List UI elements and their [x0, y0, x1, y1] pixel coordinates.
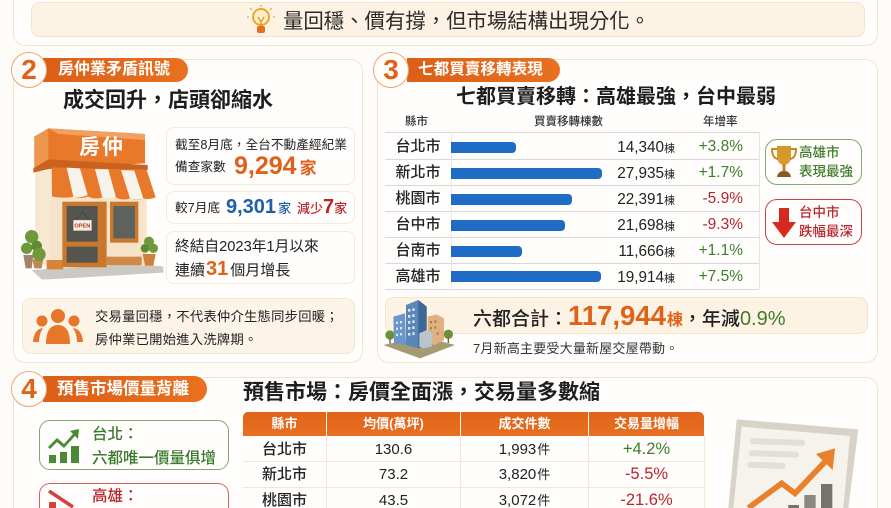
badge: Kaohsiung: 高雄： — [92, 488, 139, 505]
badge: Taipei rising: 六都唯一價量俱增 — [92, 450, 216, 467]
text: top conclusion: 量回穩、價有撐，但市場結構出現分化。 — [283, 11, 650, 33]
row: Taichung: 台中市 — [395, 216, 440, 233]
badge: Taichung deepest fall: 台中市 — [799, 205, 840, 220]
text: -5.5% — [625, 465, 668, 483]
presale table header — [243, 412, 704, 436]
text: realtor reshuffle: 房仲業已開始進入洗牌期。 — [95, 332, 258, 347]
icon: trophy — [771, 146, 797, 177]
ribbon: section 2: 房仲業矛盾訊號 — [58, 61, 170, 78]
row: Taoyuan: 桃園市 — [395, 190, 440, 207]
presale table header: 交易量增幅 — [614, 416, 679, 431]
panel: metro transfers — [377, 59, 878, 363]
text: 21,698棟 — [617, 217, 675, 234]
text: -5.9% — [702, 190, 743, 207]
number badge 2: 2 — [21, 54, 37, 85]
badge: Kaohsiung strongest — [765, 139, 862, 185]
number badge 4 — [11, 371, 47, 407]
stat box: compared to July — [166, 191, 355, 224]
text: +1.1% — [699, 242, 743, 259]
ribbon: section 3 — [407, 58, 560, 82]
text: 27,935棟 — [617, 165, 675, 182]
stat box: compared to July: 減少7家 — [297, 196, 347, 218]
text: realtor reshuffle: 交易量回穩，不代表仲介生態同步回暖； — [95, 309, 339, 324]
transfer table header — [405, 115, 738, 128]
badge: Kaohsiung — [39, 483, 229, 508]
ribbon: section 2 — [43, 58, 188, 82]
text: 14,340棟 — [617, 139, 675, 156]
panel: presale market — [13, 377, 878, 508]
text: +3.8% — [699, 138, 743, 155]
badge: Taichung deepest fall: 跌幅最深 — [799, 224, 853, 238]
heading: section 3: 七都買賣移轉：高雄最強，台中最弱 — [456, 86, 776, 108]
presale table header: 均價(萬坪) — [363, 416, 424, 431]
icon: report with rising arrow — [728, 420, 858, 508]
icon: people — [33, 309, 83, 344]
presale row: New Taipei: 新北市 — [262, 466, 307, 483]
text: 1,993件 — [499, 441, 550, 458]
icon: red down arrow — [772, 208, 796, 238]
row: Kaohsiung: 高雄市 — [395, 268, 440, 285]
row: Taipei: 台北市 — [395, 138, 440, 155]
text: +4.2% — [623, 440, 670, 458]
stat box: registered firms: 截至8月底，全台不動產經紀業 — [175, 138, 347, 152]
stat box: registered firms: 備查家數 — [175, 160, 226, 174]
row: New Taipei: 新北市 — [395, 164, 440, 181]
stat box: compared to July: 較7月底 — [175, 201, 220, 215]
number badge 3: 3 — [383, 54, 399, 85]
stat box: compared to July: 9,301家 — [226, 196, 291, 218]
panel: realtor signals — [13, 59, 363, 363]
text: +7.5% — [699, 268, 743, 285]
text: 3,820件 — [499, 466, 550, 483]
text: +1.7% — [699, 164, 743, 181]
callout: realtor reshuffle — [22, 298, 355, 354]
badge: Kaohsiung strongest: 表現最強 — [799, 164, 853, 178]
presale table header: 成交件數 — [498, 416, 550, 431]
text: -9.3% — [702, 216, 743, 233]
ribbon: section 4: 預售市場價量背離 — [57, 380, 189, 398]
icon: falling arrow — [48, 490, 74, 508]
text: 73.2 — [379, 466, 408, 483]
heading: section 4: 預售市場：房價全面漲，交易量多數縮 — [243, 381, 600, 404]
panel: top summary — [13, 0, 878, 46]
icon: storefront: OPEN — [74, 223, 90, 229]
stat box: registered firms — [166, 127, 355, 185]
stat box: registered firms: 9,294家 — [234, 152, 317, 180]
storefront sign: 房仲 — [79, 136, 125, 159]
icon: light bulb — [247, 5, 275, 33]
transfer table header: 縣市 — [405, 116, 428, 128]
icon: storefront — [21, 128, 164, 280]
text: realtor reshuffle — [95, 309, 339, 347]
ribbon: section 3: 七都買賣移轉表現 — [418, 61, 543, 78]
stat box: 31 months of growth: 連續31個月增長 — [175, 258, 290, 280]
text: six metro total: 六都合計：117,944棟，年減0.9% — [473, 300, 786, 331]
presale row: Taipei: 台北市 — [262, 441, 307, 458]
number badge 2 — [11, 52, 47, 88]
number badge 3 — [373, 52, 409, 88]
ribbon: section 4 — [43, 376, 207, 402]
transfer table header: 買賣移轉棟數 — [534, 116, 603, 128]
badge: Taichung deepest fall — [765, 199, 862, 245]
presale table header: 縣市 — [271, 416, 298, 431]
stat box: 31 months of growth — [166, 231, 355, 284]
icon: city buildings — [384, 300, 455, 358]
number badge 4: 4 — [21, 373, 37, 404]
icon: rising chart — [48, 429, 79, 463]
transfer table header: 年增率 — [703, 116, 738, 128]
text: 22,391棟 — [617, 191, 675, 208]
row: Tainan: 台南市 — [395, 242, 440, 259]
summary bar: six metro total — [385, 297, 868, 334]
text: 11,666棟 — [618, 243, 675, 260]
callout: top conclusion — [31, 2, 865, 37]
note: July high: 7月新高主要受大量新屋交屋帶動。 — [473, 341, 678, 356]
badge: Taipei rising: 台北： — [92, 426, 139, 443]
badge: Taipei rising — [39, 420, 229, 470]
badge: Kaohsiung strongest: 高雄市 — [799, 145, 840, 160]
heading: section 2: 成交回升，店頭卻縮水 — [63, 89, 273, 112]
text: 130.6 — [375, 441, 412, 458]
text: 19,914棟 — [617, 269, 675, 286]
stat box: 31 months of growth: 終結自2023年1月以來 — [175, 239, 319, 255]
